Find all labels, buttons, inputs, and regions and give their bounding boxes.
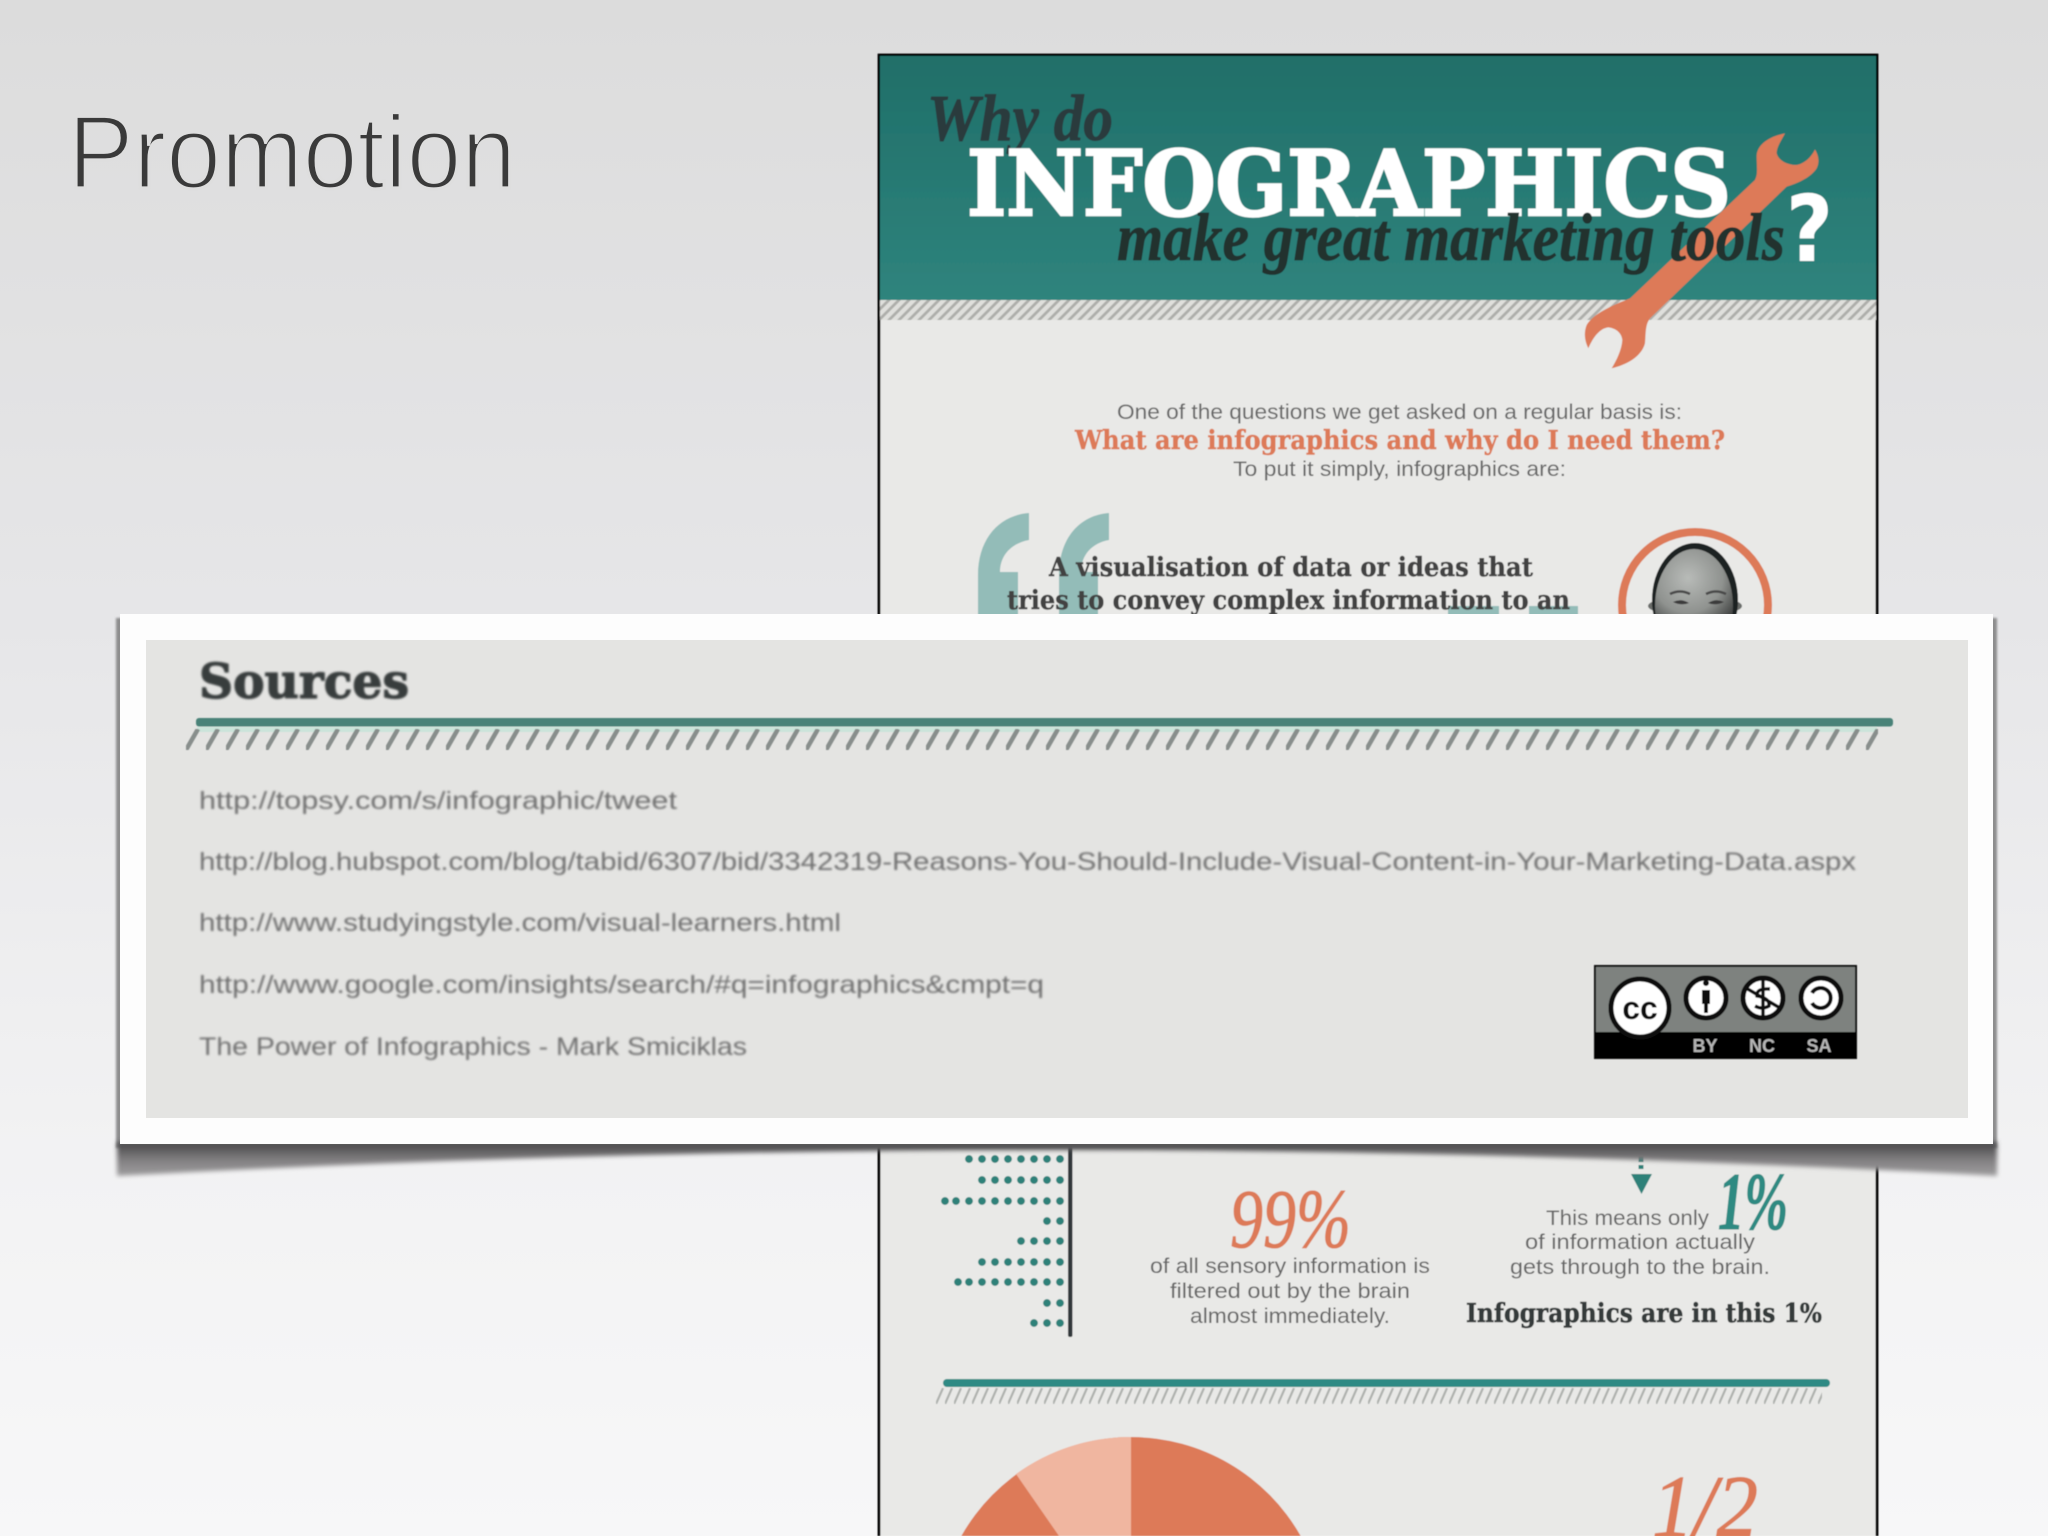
NC circle [1743, 978, 1783, 1018]
icon: opening quote mark [978, 513, 1109, 620]
rule bar [196, 718, 1893, 726]
dot chart [942, 1156, 1063, 1326]
description line 1: This means only [1546, 1207, 1710, 1230]
heading: make great marketing tools: make great marketing tools [1117, 199, 1785, 275]
card inner [146, 640, 1968, 1118]
hair [1651, 542, 1739, 614]
quote line 1: A visualisation of data or ideas that [1048, 553, 1533, 583]
pie base [961, 1437, 1301, 1536]
hatch band [880, 300, 1876, 320]
cc ring [1611, 979, 1669, 1037]
cc circle [1611, 979, 1669, 1037]
rule highlight [197, 727, 1877, 732]
NC strike [1746, 980, 1780, 1016]
BY figure [1702, 980, 1710, 1013]
SA arrow [1812, 988, 1831, 1008]
face [1654, 548, 1734, 614]
dot row 4 [1044, 1218, 1063, 1224]
pie light wedge [1016, 1437, 1131, 1536]
card frame [120, 614, 1993, 1144]
description line 3: gets through to the brain. [1510, 1256, 1770, 1279]
portrait ring [1622, 532, 1768, 678]
stat description: 99% [1150, 1255, 1430, 1328]
panel: sources card [120, 614, 1993, 1144]
description line 2: of information actually [1525, 1231, 1756, 1254]
cc label: cc [1622, 990, 1658, 1026]
source 4: http://www.google.com/insights/search/#q=infographics&cmpt=q [199, 971, 1044, 999]
stat description: 1% [1510, 1207, 1770, 1279]
description line 2: filtered out by the brain [1170, 1280, 1410, 1303]
arrow dots [1638, 1146, 1644, 1169]
heading: question mark: ? [1786, 176, 1833, 283]
card shadow [117, 1142, 1997, 1176]
eyes [1673, 600, 1724, 604]
pie chart [961, 1437, 1301, 1536]
icon: wrench [1585, 133, 1818, 368]
quote line 2: tries to convey complex information to an [1007, 586, 1570, 616]
title: Promotion: Promotion [68, 95, 516, 211]
header band [880, 56, 1876, 300]
badge footer [1595, 1032, 1856, 1058]
intro line 1: One of the questions we get asked on a regular basis is: [1117, 401, 1682, 424]
divider hatch [936, 1388, 1822, 1404]
panel: infographic [879, 55, 1877, 1536]
source list [199, 787, 1857, 1061]
arrow head [1631, 1174, 1652, 1194]
dot row 8 [1044, 1300, 1063, 1306]
description line 3: almost immediately. [1190, 1305, 1390, 1328]
intro text [1074, 401, 1725, 481]
ears [1648, 602, 1742, 611]
dot row 3 [942, 1198, 1063, 1204]
panel background [879, 55, 1877, 1536]
dot row 7 [955, 1279, 1063, 1285]
portrait head [1648, 542, 1742, 614]
intro line 2: To put it simply, infographics are: [1233, 458, 1566, 481]
dot row 6 [979, 1259, 1063, 1265]
stat: 1%: 1% [1718, 1156, 1788, 1247]
card side shadow [116, 618, 1997, 1148]
sources rule [186, 718, 1893, 750]
icon: Creative Commons badge [1595, 966, 1856, 1058]
rule hatch [186, 729, 1878, 750]
icon: closing quote mark [1448, 606, 1578, 620]
NC ring [1743, 978, 1783, 1018]
SA ring [1801, 978, 1841, 1018]
hatch stripes [880, 300, 1876, 320]
BY circle [1686, 978, 1726, 1018]
source 2: http://blog.hubspot.com/blog/tabid/6307/bid/3342319-Reasons-You-Should-Include-Visual-Content-in-Your-Marketing-Data.aspx [199, 848, 1857, 876]
portrait [1618, 528, 1772, 614]
stat: 99%: 99% [1230, 1173, 1351, 1266]
SA circle [1801, 978, 1841, 1018]
dot row 1 [966, 1156, 1063, 1162]
dot row 2 [979, 1177, 1063, 1183]
arrow: down to 1% [1631, 1146, 1652, 1194]
badge body [1595, 966, 1856, 1058]
dot row 5 [1018, 1238, 1063, 1244]
divider bar [943, 1379, 1830, 1387]
BY ring [1686, 978, 1726, 1018]
intro question: What are infographics and why do I need them? [1074, 426, 1725, 456]
quote text [1007, 553, 1570, 616]
BY label: BY [1692, 1036, 1718, 1056]
NC label: NC [1749, 1036, 1775, 1056]
section divider [936, 1379, 1830, 1404]
heading: Why do: Why do [927, 82, 1113, 155]
source 1: http://topsy.com/s/infographic/tweet [199, 787, 677, 815]
description line 1: of all sensory information is [1150, 1255, 1430, 1278]
badge labels [1692, 1036, 1832, 1056]
callout: Infographics are in this 1%: Infographics are in this 1% [1466, 1299, 1822, 1329]
brows [1670, 592, 1726, 594]
dot chart axis [1068, 1140, 1072, 1337]
heading: Sources: Sources [199, 654, 409, 710]
SA label: SA [1806, 1036, 1832, 1056]
heading: INFOGRAPHICS: INFOGRAPHICS [967, 131, 1731, 237]
source 5: The Power of Infographics - Mark Smiciklas [199, 1033, 747, 1061]
source 3: http://www.studyingstyle.com/visual-learners.html [199, 909, 841, 937]
dot row 9 [1031, 1320, 1063, 1326]
